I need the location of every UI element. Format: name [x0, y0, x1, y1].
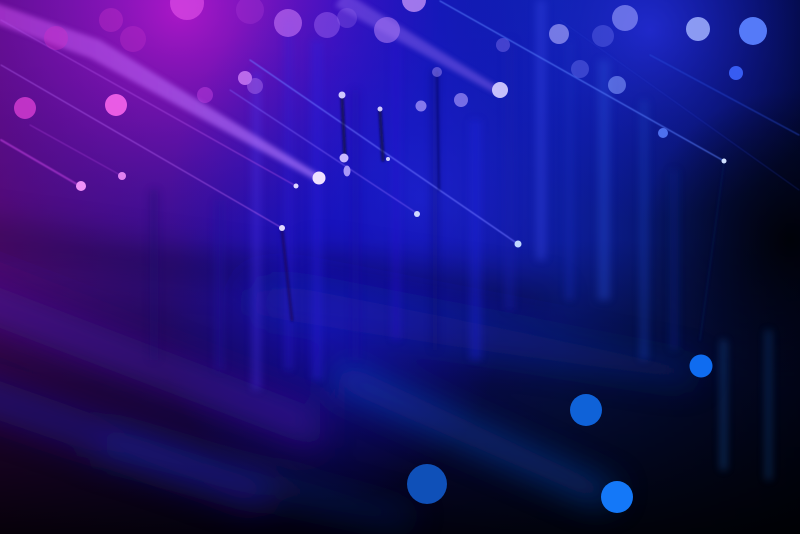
blurred diagonal light bands: [0, 215, 700, 525]
blurred vertical streaks: [150, 0, 772, 480]
bokeh lights: middle row: [14, 67, 668, 138]
bokeh lights: lower blue: [407, 354, 712, 513]
bokeh lights: top row: [44, 0, 767, 94]
thick bright magenta fiber: [0, 0, 500, 181]
thin fiber strands: [1, 1, 799, 340]
fiber tips: [76, 92, 726, 248]
